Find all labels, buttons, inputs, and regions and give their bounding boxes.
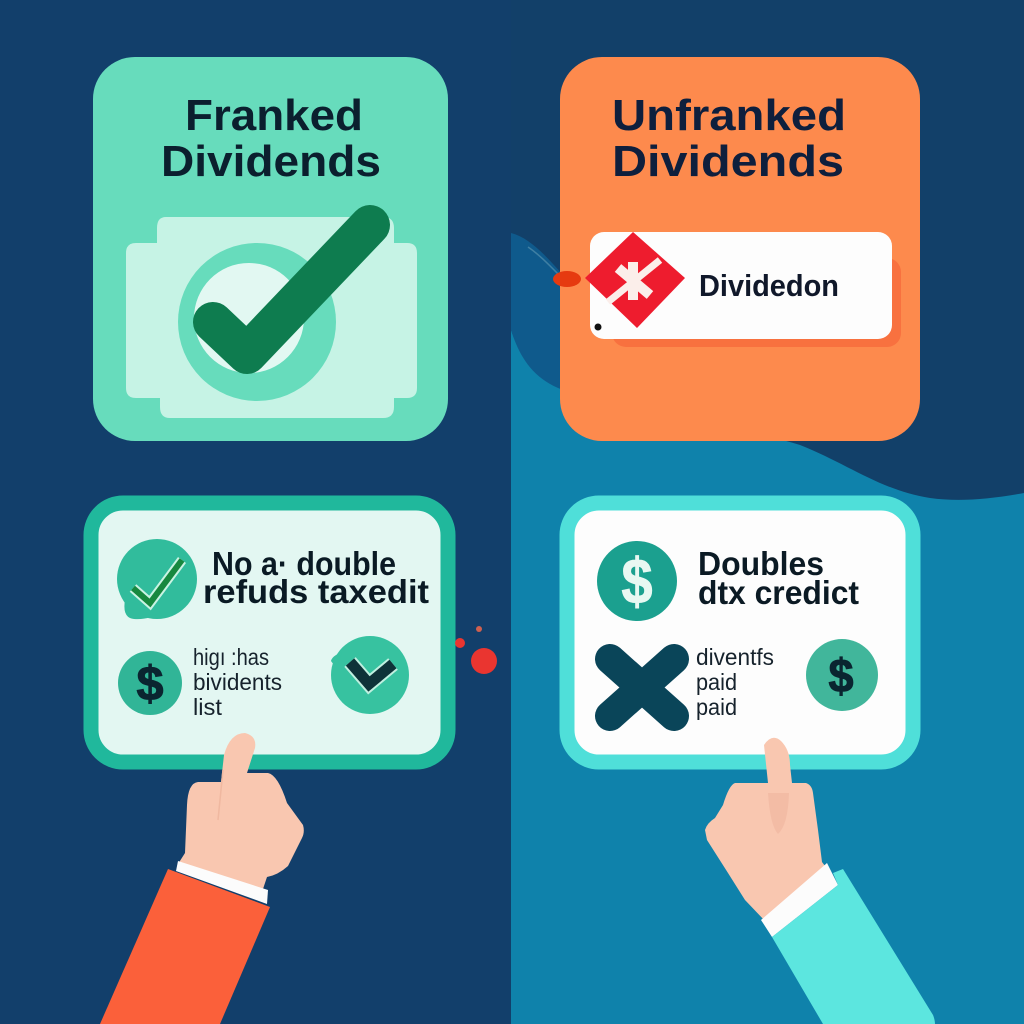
icon: check badge (331, 636, 409, 714)
icon: certificate with check mark (126, 217, 417, 418)
text: divents paid paid (696, 644, 774, 720)
heading: Unfranked Dividends (612, 91, 846, 186)
icon: check bubble (117, 539, 197, 619)
heading: Doubles dirx credict (698, 545, 859, 611)
panel: unfranked detail card (567, 503, 913, 762)
heading: Franked Dividends: Dividends (161, 137, 381, 186)
icon: dollar coin teal (597, 541, 677, 621)
icon: dollar coin (118, 651, 182, 715)
text: high has bividents list (193, 644, 282, 720)
icon: dark X (610, 659, 674, 716)
background: left navy half (0, 0, 511, 1024)
panel: unfranked dividends card (553, 57, 920, 441)
icon: red diamond with cross (585, 232, 685, 328)
text: high has bividents list: higı :has (193, 644, 269, 670)
icon: dollar coin green (806, 639, 878, 711)
label tag: Dividedon (585, 232, 901, 347)
panel: franked dividends card (93, 57, 448, 441)
icon: dollar coin teal: $ (622, 545, 652, 617)
text: high has bividents list: list (193, 694, 223, 720)
illustration: left hand with red sleeve (100, 733, 304, 1024)
illustration: right hand with teal sleeve (705, 738, 935, 1024)
panel: franked detail card (91, 503, 448, 762)
decoration: red blob (553, 271, 581, 287)
text: divents paid paid: paid (696, 669, 737, 695)
heading: No a double refuds taxedit: refuds taxedit (203, 573, 429, 610)
heading: Franked Dividends: Franked (185, 91, 363, 140)
heading: No a double refuds taxedit (203, 545, 429, 610)
label tag: Dividedon: Dividedon (699, 268, 839, 303)
text: divents paid paid: diventfs (696, 644, 774, 670)
heading: Unfranked Dividends: Dividends (612, 137, 844, 186)
text: high has bividents list: bividents (193, 669, 282, 695)
decoration: red splatter (455, 626, 497, 674)
icon: dollar coin: $ (136, 658, 164, 711)
text: divents paid paid: paid (696, 694, 737, 720)
heading: No a double refuds taxedit: No a· double (212, 545, 396, 582)
heading: Doubles dirx credict: dtx credict (698, 574, 859, 611)
heading: Doubles dirx credict: Doubles (698, 545, 824, 582)
icon: dollar coin green: $ (828, 649, 854, 702)
heading: Unfranked Dividends: Unfranked (612, 91, 846, 140)
background: right panel with waves (511, 0, 1024, 1024)
heading: Franked Dividends (161, 91, 381, 186)
